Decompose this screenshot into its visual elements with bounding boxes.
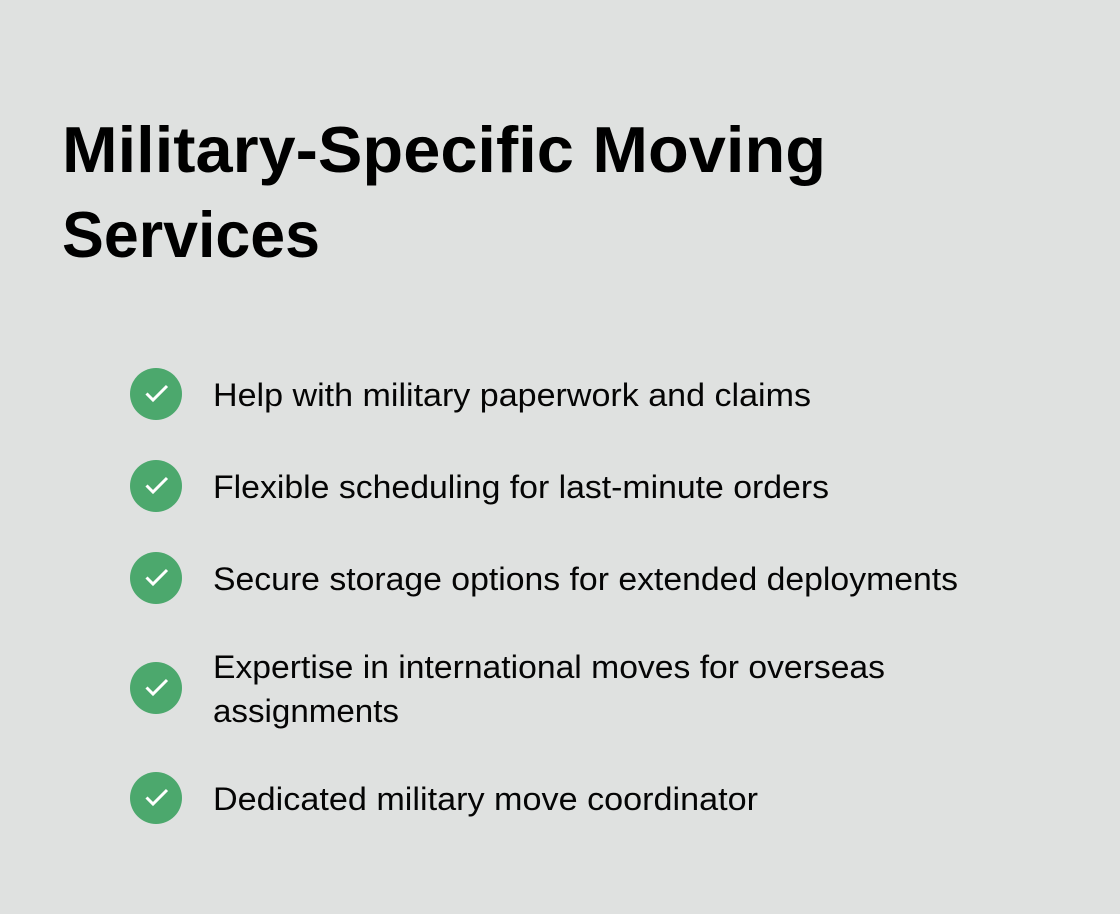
checklist	[130, 368, 958, 824]
item text 1: Help with military paperwork and claims	[213, 377, 811, 413]
title	[62, 113, 826, 271]
icon: check 5	[130, 772, 182, 824]
item text 3: Secure storage options for extended deployments	[213, 561, 958, 597]
item text 4	[213, 649, 885, 729]
item text 2: Flexible scheduling for last-minute orders	[213, 469, 829, 505]
item 4	[130, 649, 885, 729]
icon: check 4	[130, 662, 182, 714]
icon: check 3	[130, 552, 182, 604]
item text 5: Dedicated military move coordinator	[213, 781, 758, 817]
item 5	[130, 772, 758, 824]
item text 4: Expertise in international moves for overseas	[213, 649, 885, 685]
icon: check 1	[130, 368, 182, 420]
icon: check 2	[130, 460, 182, 512]
item 1	[130, 368, 811, 420]
item text 4: assignments	[213, 693, 399, 729]
item 2	[130, 460, 829, 512]
item 3	[130, 552, 958, 604]
title: Military-Specific Moving	[62, 113, 826, 186]
title: Services	[62, 198, 320, 271]
